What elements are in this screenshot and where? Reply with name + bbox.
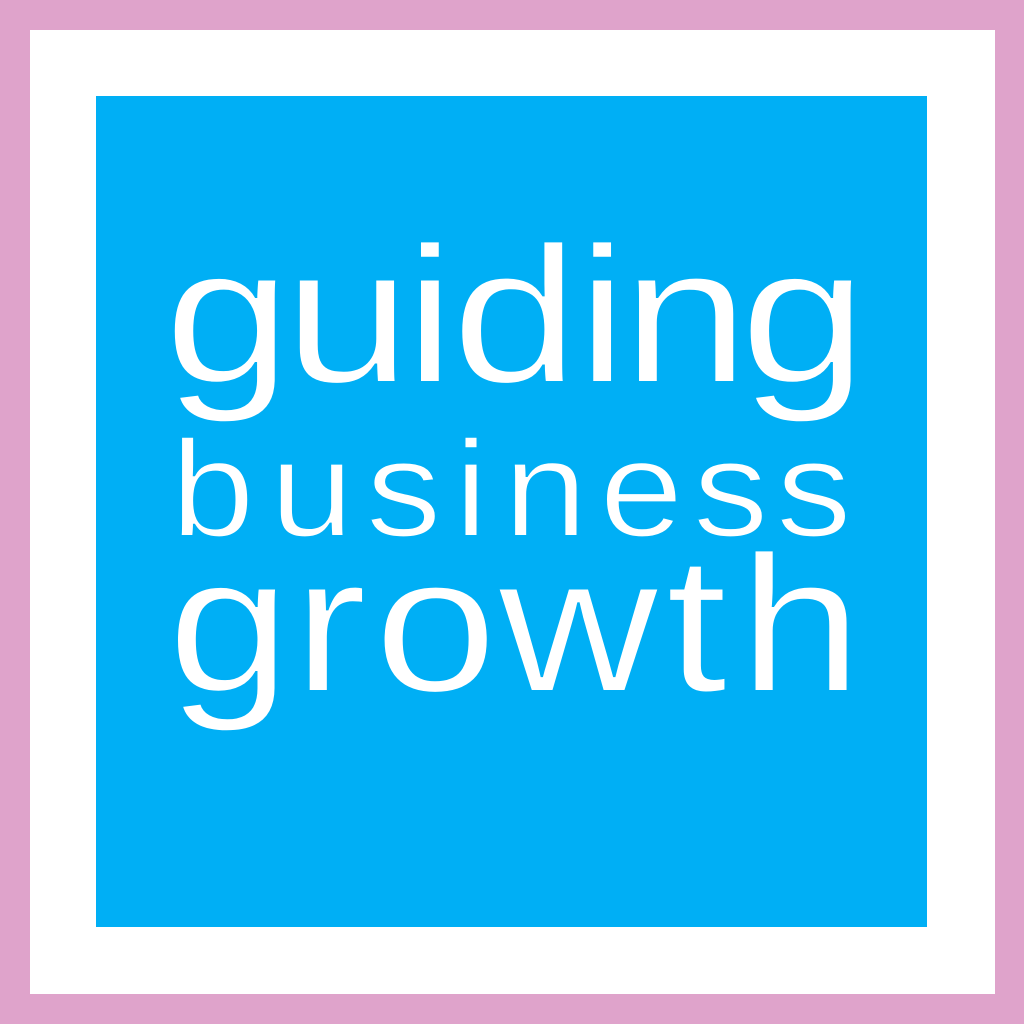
heading: guiding: guiding <box>164 206 867 423</box>
wordmark <box>164 206 867 733</box>
heading: growth: growth <box>168 517 862 733</box>
heading: business: business <box>171 412 852 565</box>
blue panel <box>96 96 927 927</box>
